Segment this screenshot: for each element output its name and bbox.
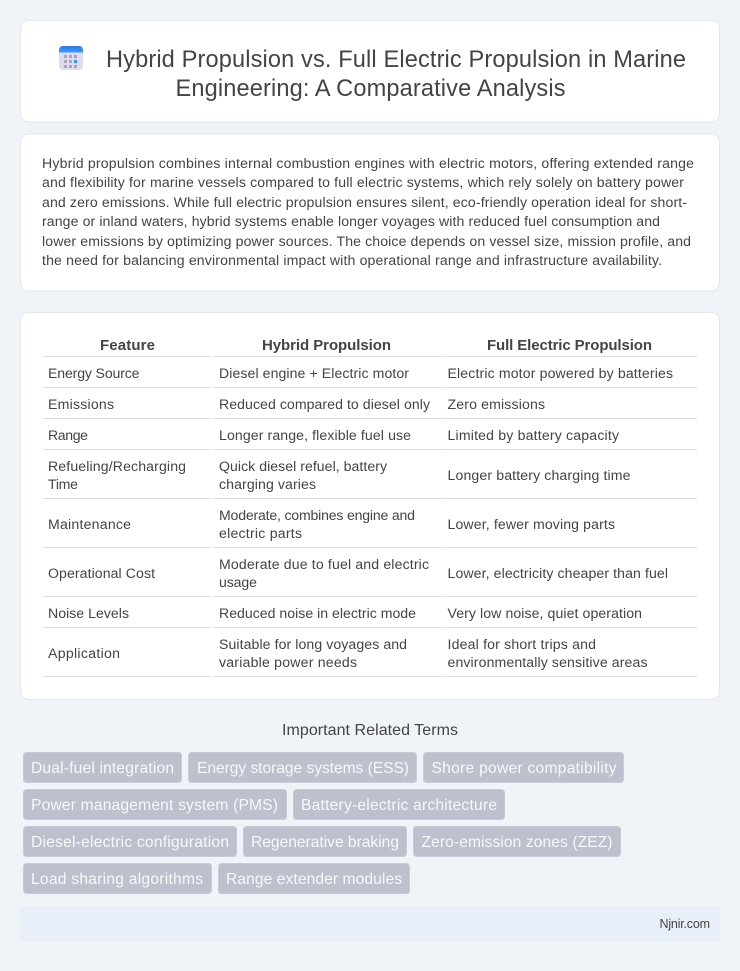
table header row: Feature [100,337,155,354]
row: emissions [48,396,545,412]
row: application: environmentally sensitive areas [448,654,648,670]
text block: introduction: the need for balancing environmental impact with operational range and infrastructure availability. [42,252,662,268]
tags: related terms: Load sharing algorithms [31,871,203,888]
table header row: Full Electric Propulsion [487,337,652,354]
title [106,47,686,102]
row: maintenance: Lower, fewer moving parts [448,516,615,532]
text block: introduction [42,155,694,268]
row: operational cost: Lower, electricity cheaper than fuel [448,565,668,581]
row: refueling/recharging time [48,458,631,492]
row: application [48,636,648,670]
row: emissions: Reduced compared to diesel only [219,396,431,412]
tags: related terms: Zero-emission zones (ZEZ) [422,834,612,851]
footer [20,907,720,941]
row: energy source: Electric motor powered by batteries [448,365,673,381]
tags: related terms: Range extender modules [226,871,402,888]
text block: introduction: and zero emissions. While full electric propulsion ensures silent, eco-friendly operation ideal for short- [42,194,687,210]
row: energy source: Energy Source [48,365,140,381]
tags: related terms: Diesel-electric configuration [31,834,229,851]
row: noise levels: Reduced noise in electric mode [219,605,416,621]
row: noise levels: Noise Levels [48,605,129,621]
row: maintenance: electric parts [219,525,302,541]
row: refueling/recharging time: Refueling/Recharging [48,458,186,474]
row: application: Application [48,645,120,661]
row: emissions: Zero emissions [448,396,545,412]
heading: important related terms: Important Related Terms [282,722,458,739]
row: range: Limited by battery capacity [448,427,620,443]
row: operational cost: Operational Cost [48,565,155,581]
table header row: Hybrid Propulsion [262,337,391,354]
row: operational cost: usage [219,574,257,590]
row: refueling/recharging time: Time [48,476,78,492]
text block: introduction: range or inland waters, hybrid systems enable longer voyages with reduced fuel consumption and [42,213,660,229]
text block: introduction: lower emissions by optimizing power sources. The choice depends on vessel size, mission profile, and [42,233,691,249]
row: application: Ideal for short trips and [448,636,596,652]
tags: related terms [24,752,624,894]
table header row [100,337,652,354]
row: emissions: Emissions [48,396,114,412]
row: application: Suitable for long voyages and [219,636,407,652]
row: range: Longer range, flexible fuel use [219,427,411,443]
row: refueling/recharging time: Longer battery charging time [448,467,631,483]
footer: Njnir.com [660,917,710,931]
text block: introduction: and flexibility for marine vessels compared to full electric systems, which rely solely on battery power [42,174,684,190]
row: energy source [48,365,673,381]
row: maintenance [48,507,615,541]
icon: calendar [59,46,83,70]
row: energy source: Diesel engine + Electric motor [219,365,409,381]
tags: related terms: Regenerative braking [251,834,399,851]
row: maintenance: Moderate, combines engine and [219,507,415,523]
title: Engineering: A Comparative Analysis [176,76,566,102]
row: operational cost [48,556,668,590]
tags: related terms: Shore power compatibility [432,760,617,777]
panel: comparison table [20,312,720,700]
row: application: variable power needs [219,654,357,670]
panel: title header [20,20,720,122]
text block: introduction: Hybrid propulsion combines internal combustion engines with electric motors, offering extended range [42,155,694,171]
title: Hybrid Propulsion vs. Full Electric Propulsion in Marine [106,47,686,73]
row: operational cost: Moderate due to fuel and electric [219,556,429,572]
row: range: Range [48,427,88,443]
tags: related terms: Dual-fuel integration [31,760,174,777]
row: refueling/recharging time: Quick diesel refuel, battery [219,458,388,474]
tags: related terms: Energy storage systems (ESS) [197,760,409,777]
row: noise levels [48,605,642,621]
row: refueling/recharging time: charging varies [219,476,316,492]
row: range [48,427,620,443]
panel: introduction [20,134,720,291]
row: maintenance: Maintenance [48,516,131,532]
row: noise levels: Very low noise, quiet operation [448,605,642,621]
tags: related terms: Battery-electric architecture [301,797,497,814]
tags: related terms: Power management system (PMS) [31,797,278,814]
